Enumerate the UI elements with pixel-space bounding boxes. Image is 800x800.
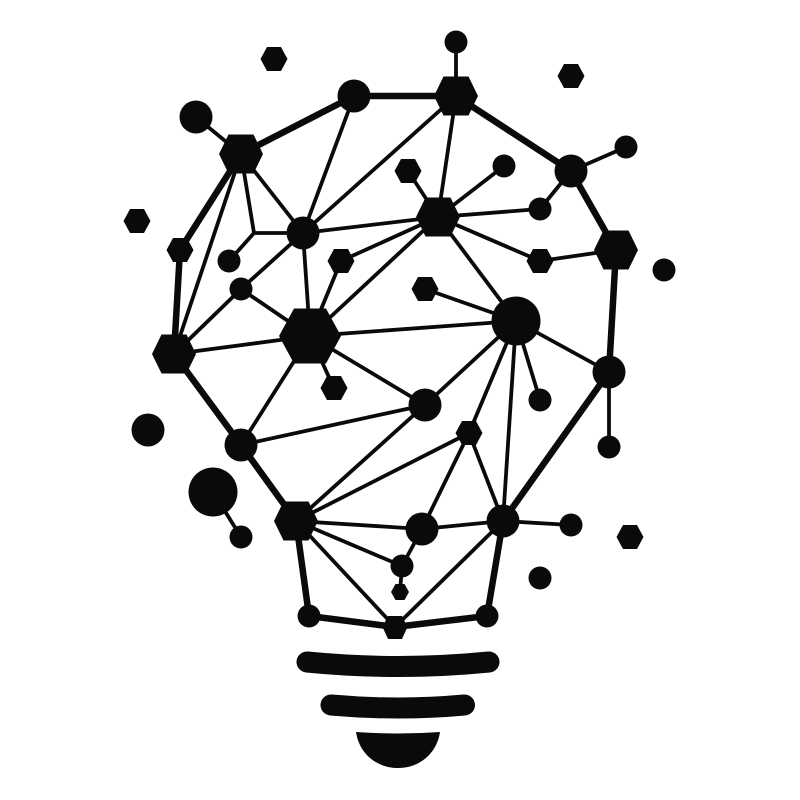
bulb outline	[174, 96, 616, 627]
bulb screw base	[307, 662, 489, 768]
internal network links	[174, 42, 626, 627]
network nodes: hexagons	[124, 47, 644, 639]
network nodes: circles	[132, 30, 676, 628]
